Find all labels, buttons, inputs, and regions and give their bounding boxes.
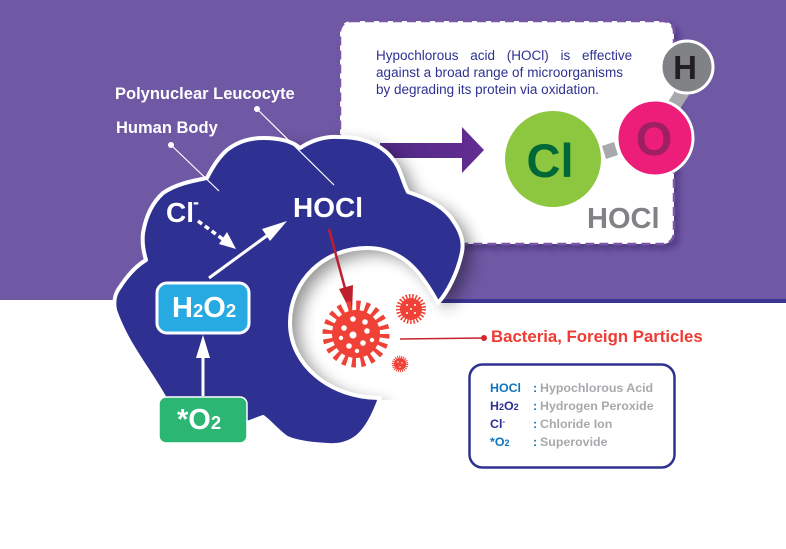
legend row: O2: Superovide <box>540 435 608 449</box>
legend row: HOCl <box>490 381 653 395</box>
panel: HOCl explanation card <box>340 21 713 244</box>
label: Human Body: Human Body <box>116 119 219 137</box>
arrow: chloride dashed <box>198 221 236 249</box>
atom: Cl <box>505 111 601 207</box>
arrow: HOCl to bacteria <box>329 229 353 314</box>
legend row: O2: : <box>533 435 537 449</box>
arrow: to molecule <box>380 127 484 173</box>
legend row: Cl: Chloride Ion <box>540 417 612 431</box>
atom: O: O <box>636 112 672 165</box>
legend row: HOCl: : <box>533 381 537 395</box>
box: superoxide: *O2 <box>177 404 221 436</box>
icon: large bacterium <box>329 307 383 361</box>
text block: HOCl description: by degrading its protein via oxidation. <box>376 82 599 97</box>
box: H2O2: H2O2 <box>172 292 236 324</box>
legend row: Cl: : <box>533 417 537 431</box>
atom: Cl: Cl <box>526 134 574 187</box>
legend row: O2 <box>490 435 608 449</box>
arrow: O2 to H2O2 <box>196 335 210 396</box>
box: H2O2 <box>157 283 249 333</box>
label: HOCl: HOCl <box>587 203 660 235</box>
box: superoxide <box>159 397 247 443</box>
legend row: H2O2: : <box>533 399 537 413</box>
label: HOCl in cell: HOCl <box>293 192 363 223</box>
label: Polynuclear Leucocyte: Polynuclear Leucocyte <box>115 85 295 103</box>
purple background band <box>0 0 786 303</box>
legend row: HOCl: Hypochlorous Acid <box>540 381 653 395</box>
cell: human body <box>114 137 463 445</box>
legend row: Cl: Cl <box>490 417 502 431</box>
label: chloride ion: - <box>193 192 199 212</box>
legend row: O2: *O2 <box>490 435 509 449</box>
callout: bacteria label <box>400 327 703 346</box>
legend row: H2O2: H2O2 <box>490 399 519 413</box>
arrow: H2O2 to HOCl <box>209 221 287 278</box>
legend row: Cl: - <box>502 417 505 426</box>
molecule: HOCl <box>505 41 713 207</box>
atom: H <box>661 41 713 93</box>
label: chloride ion: Cl <box>166 197 194 228</box>
text block: HOCl description: against a broad range of microorganisms <box>376 65 623 80</box>
legend row: Cl <box>490 417 612 431</box>
legend row: H2O2: Hydrogen Peroxide <box>540 399 654 413</box>
text block: HOCl description: Hypochlorous acid (HOCl) is effective <box>376 48 632 63</box>
atom: O <box>617 100 693 176</box>
text block: HOCl description <box>376 48 632 97</box>
label: Polynuclear Leucocyte <box>115 85 334 185</box>
icon: medium bacterium <box>398 296 424 322</box>
atom: H: H <box>673 49 697 86</box>
legend row: HOCl: HOCl <box>490 381 521 395</box>
legend row: H2O2 <box>490 399 654 413</box>
label: Human Body <box>116 119 219 191</box>
notch background <box>290 248 440 400</box>
icon: small bacterium <box>393 357 407 371</box>
callout: bacteria label: Bacteria, Foreign Particles <box>491 327 703 346</box>
panel: legend <box>470 364 674 468</box>
cell shadow <box>280 132 480 400</box>
